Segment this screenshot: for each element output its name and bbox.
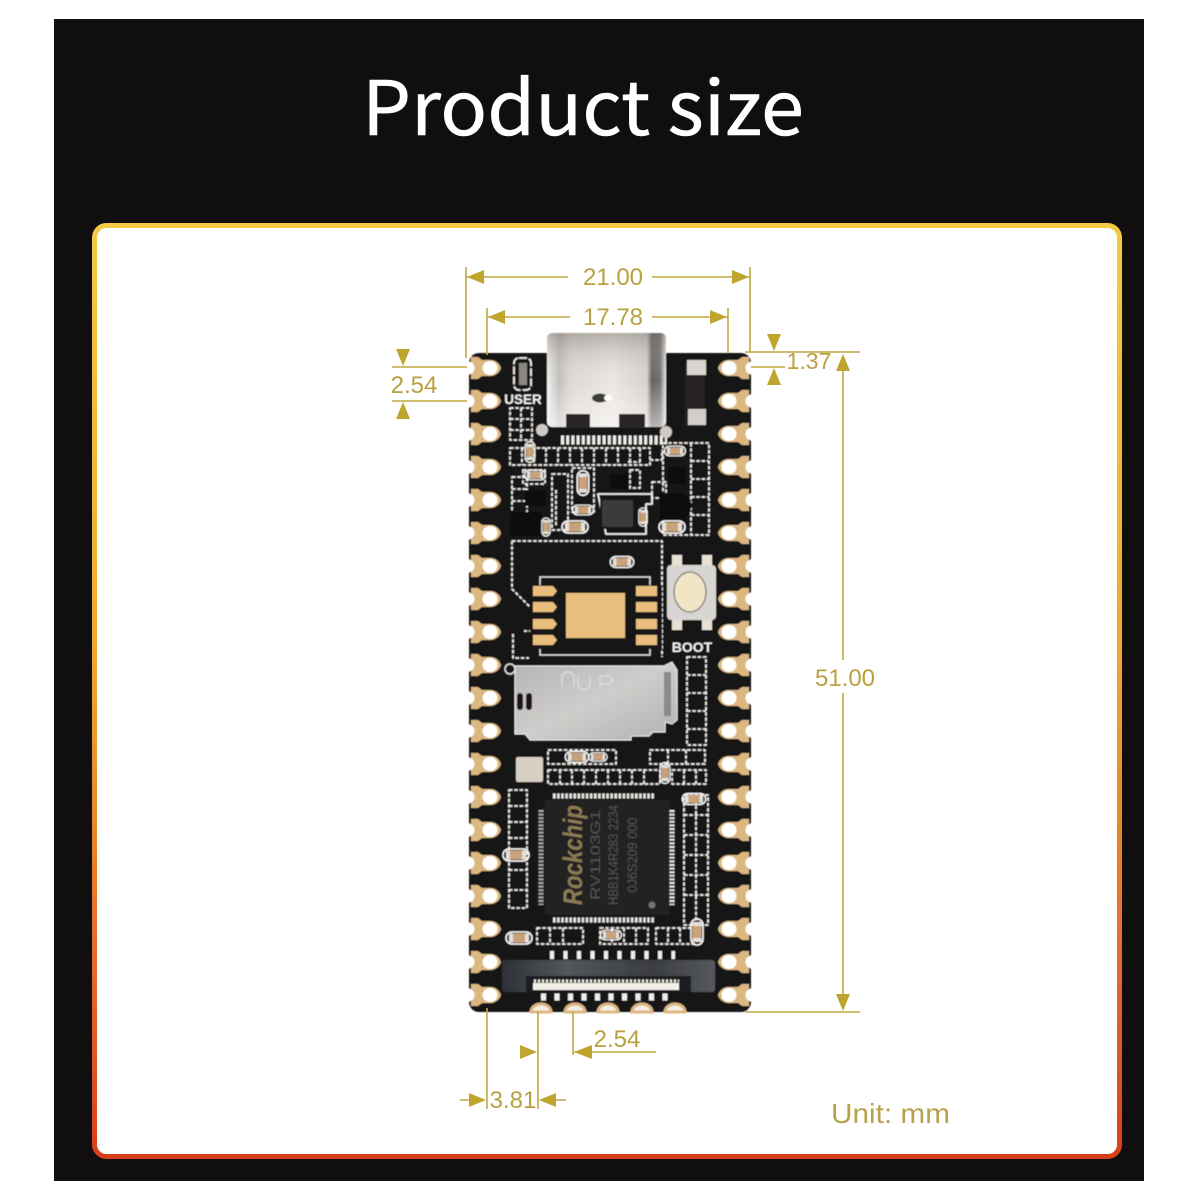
- chip brand text: Rockchip: [558, 805, 588, 905]
- dimension: 17.78 hole spacing: 17.78: [583, 304, 643, 331]
- dimension: 1.37 edge offset: 1.37: [787, 348, 831, 374]
- chip marking text: [587, 805, 640, 905]
- dimension: 51.00 overall length: [745, 354, 875, 1012]
- left castellated pads: [462, 357, 501, 1006]
- small dark ICs: [510, 467, 693, 536]
- dimension: 2.54 pad pitch: [391, 349, 467, 419]
- dimension: 2.54 pad pitch: 2.54: [391, 372, 437, 399]
- dimension: 3.81 bottom offset: 3.81: [490, 1087, 536, 1114]
- USER label: USER: [504, 392, 542, 407]
- Rockchip processor: [541, 796, 672, 920]
- dimension: 17.78 hole spacing: [487, 304, 728, 355]
- crystal: [516, 757, 543, 782]
- chip marking text: HBB1K4R283 2234: [605, 805, 621, 905]
- BOOT button: [667, 555, 716, 630]
- unit note: Unit: mm: [831, 1098, 950, 1129]
- dimension: 2.54 bottom pitch: 2.54: [594, 1026, 640, 1053]
- BOOT label: BOOT: [672, 639, 713, 655]
- dimension: 1.37 edge offset: [745, 334, 860, 385]
- right castellated pads: [718, 357, 758, 1006]
- dimension: 21.00 overall width: [466, 264, 750, 358]
- USER LED: [514, 358, 531, 390]
- PCB body: [469, 353, 751, 1012]
- silkscreen dotted outlines: [509, 408, 709, 944]
- bottom edge pads: [531, 1004, 685, 1012]
- board: PCB photograph drawing: [462, 333, 758, 1012]
- chip marking text: 0J6S209 000: [624, 817, 640, 892]
- small capacitors: [503, 442, 706, 945]
- dimension: 3.81 bottom offset: [460, 1008, 566, 1114]
- title: Product size: [362, 48, 804, 157]
- dimension: 2.54 bottom pitch: [520, 1012, 656, 1109]
- dimension: 21.00 overall width: 21.00: [583, 264, 643, 291]
- panel: white card with gradient border: [94, 226, 1120, 1156]
- microSD slot: [505, 662, 677, 740]
- chip marking text: RV1103G1: [587, 810, 603, 900]
- side diode component: [685, 360, 706, 426]
- FPC connector: [502, 955, 715, 997]
- small QFN chip: [601, 499, 634, 528]
- dimension: 51.00 overall length: 51.00: [815, 665, 875, 692]
- flash chip footprint: [530, 577, 662, 655]
- USB-C connector: [536, 333, 672, 440]
